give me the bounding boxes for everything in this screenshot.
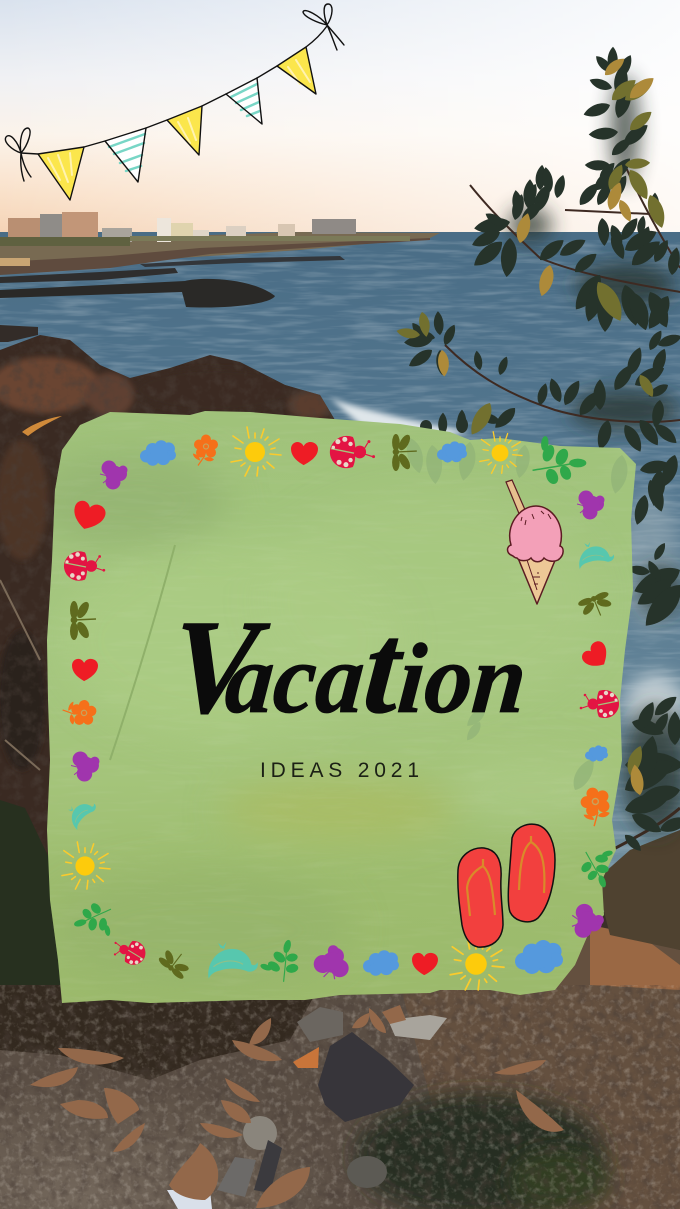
icon: cloud: [363, 950, 399, 976]
pennant: teal stripes: [105, 128, 146, 182]
ground: [0, 985, 680, 1209]
ground tones: [0, 830, 680, 1209]
icon: cloud: [437, 441, 467, 463]
icon: leaf sprig: [258, 935, 306, 985]
icon: leaf sprig: [533, 436, 586, 486]
icon: butterfly: [100, 460, 128, 490]
photo background: sky: [0, 0, 680, 245]
stones and dry leaves: [30, 1005, 564, 1209]
pennant: yellow: [167, 106, 202, 155]
icon: ladybug: [580, 690, 619, 718]
foliage density shadows: [508, 75, 680, 835]
icon: ladybug: [64, 551, 105, 581]
tree branches and foliage on the right: [396, 47, 680, 854]
icon: bird: [577, 540, 615, 569]
rock highlights: [0, 340, 332, 820]
icon: heart: [291, 442, 318, 465]
icon: ladybug: [109, 934, 149, 968]
decorative icon border: [61, 427, 623, 990]
icon: leaf sprig: [575, 843, 623, 893]
breakwater rocks in the sea: [0, 256, 345, 342]
icon: dragonfly: [577, 590, 615, 621]
pennant: yellow: [277, 47, 316, 94]
icon: leaf sprig: [70, 898, 118, 944]
icon: dragonfly: [392, 433, 417, 471]
icon: dragonfly: [70, 600, 96, 640]
icon: sun: [480, 432, 522, 473]
green torn-paper panel: [30, 410, 640, 1010]
icon: ice cream cone: [506, 480, 563, 604]
pennant: teal stripes: [226, 78, 262, 124]
icon: flower: [61, 696, 99, 730]
bunting garland: [5, 4, 344, 200]
icon: bird: [63, 794, 100, 830]
icon: heart: [579, 638, 614, 673]
icon: heart: [70, 499, 107, 533]
bow: right: [303, 4, 344, 50]
green shrub lower left: [0, 800, 70, 1040]
title: Vacation: Vacation: [165, 592, 534, 742]
string: [21, 26, 327, 154]
rocky shore on the left: [0, 335, 335, 900]
icon: sun: [231, 427, 281, 476]
icon: ladybug: [330, 436, 375, 468]
icon: bird: [208, 942, 258, 979]
icon: butterfly: [310, 940, 356, 986]
icon: flower: [576, 783, 617, 828]
icon: heart: [412, 953, 438, 975]
icon: butterfly: [577, 490, 604, 520]
icon: flower: [193, 434, 218, 466]
icon: cloud: [515, 940, 563, 974]
icon: red flip-flops: [458, 824, 555, 947]
icon: butterfly: [566, 901, 607, 943]
icon: dragonfly: [157, 944, 194, 981]
icon: cloud: [140, 440, 176, 466]
icon: heart: [72, 659, 98, 681]
panel translucent textures: [52, 435, 628, 976]
photo background: sea: [0, 232, 680, 912]
icon: sun: [450, 937, 504, 990]
icon: cloud: [585, 745, 608, 762]
pennant: yellow: [38, 147, 84, 200]
icon: sun: [62, 842, 110, 889]
subtitle: Ideas 2021: IDEAS 2021: [260, 759, 419, 782]
bow: left: [5, 128, 31, 181]
distant shoreline and hotel skyline: [0, 212, 440, 275]
icon: butterfly: [71, 752, 99, 781]
